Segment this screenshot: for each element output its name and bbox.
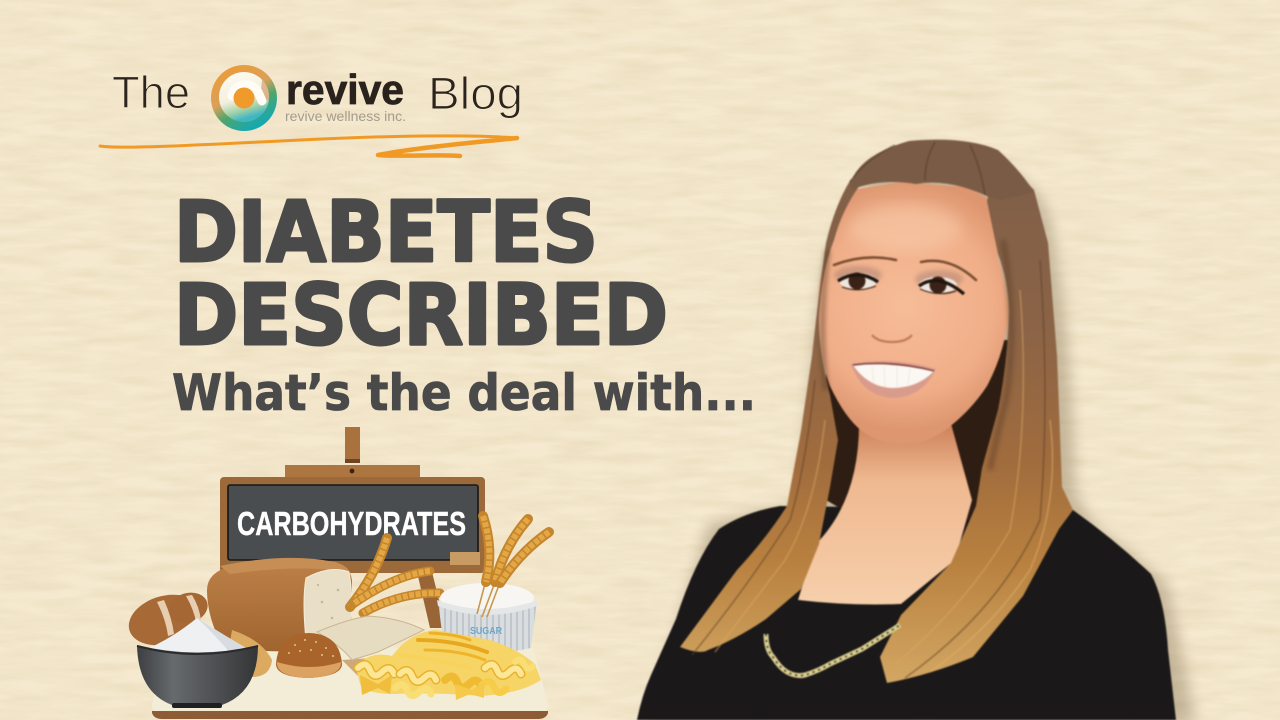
icon: wheat bundle right [477,516,549,617]
sugar label: SUGAR [470,626,503,637]
hair shade near face [822,240,1011,470]
icon: loaf of bread [207,558,352,652]
gold chain necklace [766,625,900,676]
chalkboard label: CARBOHYDRATES [237,505,466,542]
right hair lock [880,152,1073,683]
icon: golden roll behind bowl [225,630,272,677]
eyes [838,272,964,294]
cutting board [152,647,548,719]
mouth: smile [851,361,936,398]
portrait drop shadow [648,153,1196,720]
logo word: Blog: Blog [428,68,523,119]
title line 2: DESCRIBED [174,266,668,364]
back hair shadow [826,340,1010,520]
logo tagline: revive wellness inc. [285,109,406,124]
face [818,182,1009,444]
nose [872,335,912,342]
portrait: smiling woman in black top [637,140,1196,720]
logo word: The: The [112,67,190,118]
icon: baguette slices [123,587,211,653]
top of hair [851,140,1034,200]
icon: wheat bundle left [350,538,440,613]
eye makeup shadow [834,266,963,288]
logo: The revive Blog [100,65,523,156]
title: Diabetes Described [172,183,756,422]
neckline of the top [790,600,901,640]
logo word: revive: revive [286,66,404,113]
icon: seeded bun [276,633,342,678]
illustration: carbohydrate foods and chalkboard [123,427,549,719]
icon: lying bread slice [317,616,424,690]
hair strands [692,142,1052,678]
black top [637,506,1176,720]
icon: sugar ramekin [437,583,538,653]
subtitle: What’s the deal with... [172,364,756,422]
orange underline scribble [100,136,517,156]
neck and chest [798,420,972,604]
forehead highlight [849,204,961,252]
left hair lock [680,179,860,652]
icon: pasta pile [356,630,541,700]
eyebrows [834,257,976,280]
icon: revive ring logo [211,65,277,131]
easel with chalkboard [220,427,485,628]
icon: flour bowl [137,618,258,708]
title line 1: DIABETES [174,183,598,281]
